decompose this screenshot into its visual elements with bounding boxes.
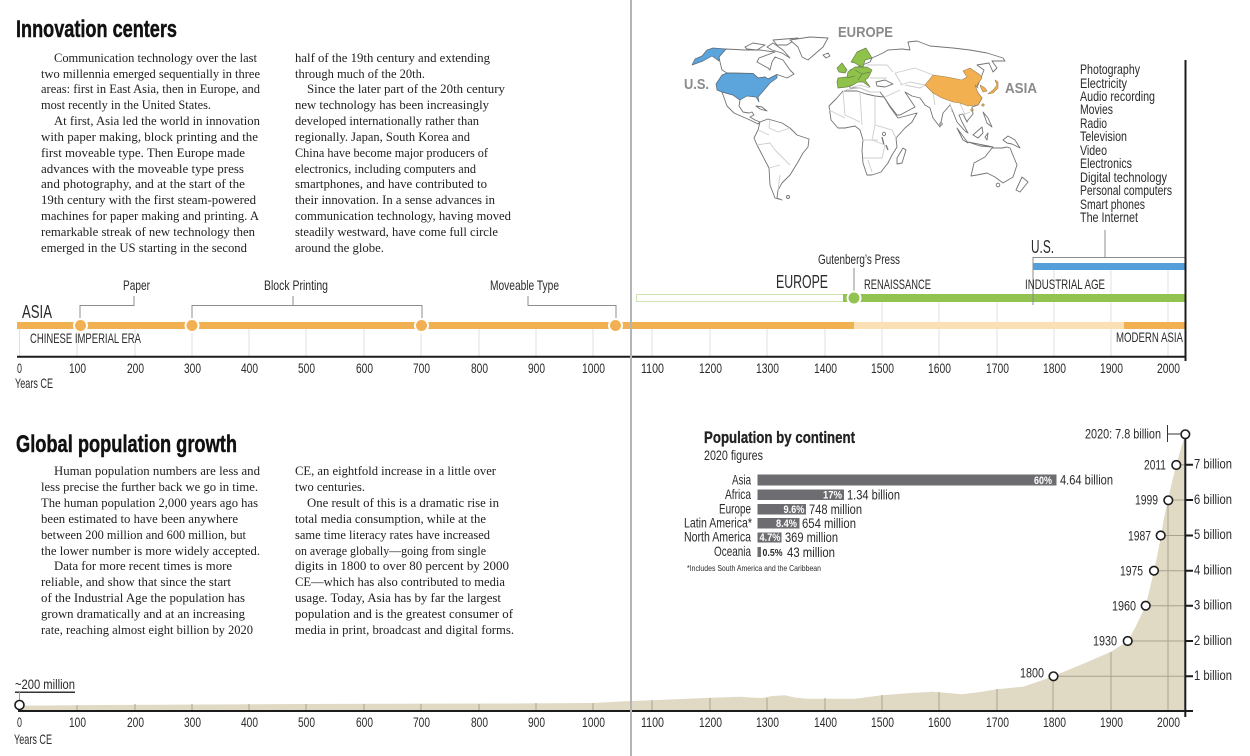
map: Europe xyxy=(837,48,872,88)
bar percentages: 9.6% xyxy=(784,504,805,516)
footnote: *Includes South America and the Caribbean xyxy=(687,564,821,573)
data point labels: 1975 xyxy=(1120,562,1143,578)
axis labels: population years: 100 xyxy=(69,714,86,730)
axis labels: timeline years: 1300 xyxy=(756,360,779,376)
area chart: world population xyxy=(14,425,1232,747)
data point labels: 2011 xyxy=(1144,456,1166,472)
text block: innovation centers column two: half of the 19th century and extending xyxy=(295,51,491,65)
text block: innovation centers column one: most recently in the United States. xyxy=(41,98,211,112)
text block: population column one: rate, reaching almost eight billion by 2020 xyxy=(41,623,253,637)
text block: population column one xyxy=(41,464,261,637)
timeline labels: Gutenberg’s Press xyxy=(818,251,900,267)
text block: population column one: of the Industrial Age the population has xyxy=(41,591,245,605)
~200 million callout: ~200 million xyxy=(15,676,75,692)
bar percentages: 4.7% xyxy=(760,532,781,544)
value labels: 369 million xyxy=(785,529,838,545)
data point markers xyxy=(15,430,1190,710)
data point labels: 1930 xyxy=(1093,632,1117,648)
text block: population column one: the lower number is more widely accepted. xyxy=(41,544,260,558)
text block: innovation centers column two: China have become major producers of xyxy=(295,146,489,160)
axis labels: population years: 2000 xyxy=(1157,714,1180,730)
text block: innovation centers column one: emerged in the US starting in the second xyxy=(41,241,248,255)
axis labels: timeline years: 1100 xyxy=(641,360,664,376)
bar percentages: 60% xyxy=(1034,475,1052,487)
text block: population column one: less precise the further back we go in time. xyxy=(41,480,258,494)
list: US technologies: Radio xyxy=(1080,115,1107,131)
axis labels: timeline years: 0 xyxy=(17,360,22,376)
axis labels: timeline years: 300 xyxy=(184,360,201,376)
axis labels: population years: 1100 xyxy=(641,714,664,730)
map: East Asia xyxy=(925,68,998,111)
continent labels: Europe xyxy=(719,500,751,516)
text block: population column one: Data for more recent times is more xyxy=(54,559,232,573)
axis labels: population years: 600 xyxy=(356,714,373,730)
billion axis labels xyxy=(1194,456,1232,683)
billion axis labels: 5 billion xyxy=(1194,526,1232,542)
axis labels: timeline years: 1800 xyxy=(1043,360,1066,376)
text block: innovation centers column one: machines for paper making and printing. A xyxy=(41,209,259,223)
list: US technologies: Digital technology xyxy=(1080,169,1167,185)
bar: Europe eras xyxy=(636,294,1185,302)
billion axis labels: 1 billion xyxy=(1194,667,1232,683)
continent labels: Asia xyxy=(732,472,751,488)
list: US technologies: Personal computers xyxy=(1080,182,1172,198)
timeline labels: RENAISSANCE xyxy=(864,276,931,292)
callouts: Asia inventions xyxy=(80,230,1185,318)
axis labels: timeline years: 500 xyxy=(298,360,315,376)
axis labels: timeline years: Years CE xyxy=(15,375,53,391)
text block: population column two: population and is the greatest consumer of xyxy=(295,607,514,621)
continent labels: Latin America* xyxy=(684,514,752,530)
timeline labels: EUROPE xyxy=(776,272,828,292)
axis labels: timeline years: 1200 xyxy=(699,360,722,376)
text block: innovation centers column two: developed internationally rather than xyxy=(295,114,480,128)
bar percentages: 17% xyxy=(823,490,842,502)
chart subtitle: 2020 figures xyxy=(704,447,763,463)
billion axis labels: 4 billion xyxy=(1194,562,1232,578)
data point labels xyxy=(1020,426,1166,680)
timeline labels: INDUSTRIAL AGE xyxy=(1025,276,1105,292)
continent labels: North America xyxy=(684,528,751,544)
list: US technologies: Smart phones xyxy=(1080,196,1145,212)
text block: population column one: grown dramatically and at an increasing xyxy=(41,607,246,621)
timeline labels: Block Printing xyxy=(264,277,328,293)
chart title: Population by continent xyxy=(704,428,855,447)
value labels xyxy=(785,472,1113,560)
text block: innovation centers column one: areas: first in East Asia, then in Europe, and xyxy=(41,82,261,96)
axis labels: population years: 1700 xyxy=(986,714,1009,730)
axis labels: population years: 700 xyxy=(413,714,430,730)
axis labels: population years: 800 xyxy=(471,714,488,730)
list: US technologies: Television xyxy=(1080,128,1127,144)
text block: innovation centers column two xyxy=(295,51,512,255)
map labels: EUROPE xyxy=(838,24,893,41)
value labels: 1.34 billion xyxy=(847,486,900,502)
text block: innovation centers column one: first moveable type. Then Europe made xyxy=(41,146,245,160)
timeline labels xyxy=(22,237,1183,346)
axis labels: timeline years: 1500 xyxy=(871,360,894,376)
data point labels: 1960 xyxy=(1112,598,1136,614)
bar percentages xyxy=(760,475,1052,544)
value labels: 748 million xyxy=(809,501,862,517)
axis labels: timeline years: 600 xyxy=(356,360,373,376)
axis labels: timeline years: 700 xyxy=(413,360,430,376)
text block: innovation centers column one: At first, Asia led the world in innovation xyxy=(54,114,261,128)
2020 marker line xyxy=(1167,425,1180,442)
axis labels: population years: 1000 xyxy=(582,714,605,730)
bar chart: population by continent: 0.5% xyxy=(762,548,783,559)
continent labels: Africa xyxy=(725,486,751,502)
data point labels: 2020: 7.8 billion xyxy=(1085,426,1161,442)
axis labels: population years: 1500 xyxy=(871,714,894,730)
text block: innovation centers column two: their innovation. In a sense advances in xyxy=(295,193,496,207)
bars xyxy=(758,474,1056,557)
axis labels: population years: Years CE xyxy=(14,731,52,747)
text block: innovation centers column one: and photography, and at the start of the xyxy=(41,177,245,191)
list: US technologies: The Internet xyxy=(1080,209,1138,225)
axis labels: timeline years: 2000 xyxy=(1157,360,1180,376)
text block: innovation centers column two: smartphones, and have contributed to xyxy=(295,177,487,191)
list: US technologies: Electronics xyxy=(1080,155,1132,171)
map labels xyxy=(684,24,1037,97)
text block: population column two: digits in 1800 to over 80 percent by 2000 xyxy=(295,559,509,573)
axis labels: timeline years: 1900 xyxy=(1100,360,1123,376)
text block: population column two: media in print, broadcast and digital forms. xyxy=(295,623,514,637)
billion axis labels: 7 billion xyxy=(1194,456,1232,472)
axis labels: population years: 1600 xyxy=(928,714,951,730)
text block: innovation centers column two: Since the later part of the 20th century xyxy=(307,82,506,96)
text block: population column two: total media consumption, while at the xyxy=(295,512,486,526)
text block: population column two: on average globally—going from single xyxy=(295,544,486,558)
timeline labels: MODERN ASIA xyxy=(1116,329,1183,345)
axis labels: population years: 300 xyxy=(184,714,201,730)
text block: innovation centers column one: Communication technology over the last xyxy=(54,51,257,65)
text block: innovation centers column one: two millennia emerged sequentially in three xyxy=(41,67,260,81)
axis labels: timeline years: 400 xyxy=(241,360,258,376)
text block: population column one: between 200 million and 600 million, but xyxy=(41,528,246,542)
axis labels: population years: 1900 xyxy=(1100,714,1123,730)
map: United States xyxy=(692,48,777,102)
axis labels: population years: 1300 xyxy=(756,714,779,730)
map: interior borders xyxy=(757,65,970,190)
list: US technologies: Electricity xyxy=(1080,75,1127,91)
timeline labels: CHINESE IMPERIAL ERA xyxy=(30,330,141,346)
text block: population column two xyxy=(295,464,514,637)
text block: innovation centers column two: steadily westward, have come full circle xyxy=(295,225,498,239)
data point labels: 1999 xyxy=(1135,492,1158,508)
~200 million callout xyxy=(15,676,75,700)
axis labels: population years: 200 xyxy=(127,714,144,730)
bar: US era xyxy=(1033,263,1185,270)
axis labels: population years: 900 xyxy=(528,714,545,730)
map: land outlines xyxy=(719,37,1028,200)
heading: Innovation centers: Innovation centers xyxy=(16,16,177,43)
continent labels xyxy=(684,472,752,559)
text block: innovation centers column two: regionally. Japan, South Korea and xyxy=(295,130,471,144)
markers: Asia inventions and Gutenberg xyxy=(74,292,860,332)
value labels: 43 million xyxy=(787,544,835,560)
axis labels: timeline years xyxy=(15,360,1180,391)
text block: innovation centers column two: through much of the 20th. xyxy=(295,67,425,81)
billion axis labels: 6 billion xyxy=(1194,491,1232,507)
axis labels: population years xyxy=(14,714,1180,747)
axis labels: population years: 400 xyxy=(241,714,258,730)
timeline labels: Moveable Type xyxy=(490,277,559,293)
text block: population column one: been estimated to have been anywhere xyxy=(41,512,238,526)
map labels: ASIA xyxy=(1005,80,1037,97)
text block: population column one: The human population 2,000 years ago has xyxy=(41,496,258,510)
axis labels: population years: 500 xyxy=(298,714,315,730)
text block: population column two: two centuries. xyxy=(295,480,365,494)
fold line xyxy=(630,0,632,756)
timeline labels: Paper xyxy=(123,277,150,293)
text block: innovation centers column one: advances with the moveable type press xyxy=(41,162,244,176)
bar: Asia eras xyxy=(17,322,1185,329)
heading: Global population growth: Global population growth xyxy=(16,431,237,458)
axis labels: population years: 1400 xyxy=(814,714,837,730)
bar chart: population by continent xyxy=(684,428,1113,573)
text block: population column two: usage. Today, Asia has by far the largest xyxy=(295,591,502,605)
text block: population column two: same time literacy rates have increased xyxy=(295,528,491,542)
text block: population column two: CE—which has also contributed to media xyxy=(295,575,505,589)
text block: innovation centers column one: 19th century with the first steam-powered xyxy=(41,193,257,207)
list: US technologies: Movies xyxy=(1080,101,1113,117)
text block: innovation centers column two: around the globe. xyxy=(295,241,384,255)
continent labels: Oceania xyxy=(714,543,751,559)
axis labels: population years: 1200 xyxy=(699,714,722,730)
bar percentages: 8.4% xyxy=(776,518,797,530)
text block: population column one: reliable, and show that since the start xyxy=(41,575,232,589)
timeline: Innovation centers xyxy=(15,60,1186,391)
text block: innovation centers column two: communication technology, having moved xyxy=(295,209,512,223)
text block: population column two: One result of this is a dramatic rise in xyxy=(307,496,500,510)
axis labels: timeline years: 1000 xyxy=(582,360,605,376)
axis labels: timeline years: 1700 xyxy=(986,360,1009,376)
timeline labels: U.S. xyxy=(1031,237,1054,257)
value labels: 4.64 billion xyxy=(1060,472,1113,488)
text block: population column two: CE, an eightfold increase in a little over xyxy=(295,464,497,478)
axes xyxy=(17,60,1186,361)
data point labels: 1987 xyxy=(1128,528,1151,544)
list: US technologies: Video xyxy=(1080,142,1107,158)
timeline labels: ASIA xyxy=(22,302,52,322)
value labels: 654 million xyxy=(802,515,856,531)
axis labels: timeline years: 900 xyxy=(528,360,545,376)
text block: population column one: Human population numbers are less and xyxy=(54,464,261,478)
billion axis labels: 3 billion xyxy=(1194,596,1232,612)
billion axis labels: 2 billion xyxy=(1194,632,1232,648)
list: US technologies: Audio recording xyxy=(1080,88,1155,104)
axis labels: population years: 1800 xyxy=(1043,714,1066,730)
axis labels: timeline years: 1400 xyxy=(814,360,837,376)
axes xyxy=(18,434,1193,717)
axis labels: timeline years: 800 xyxy=(471,360,488,376)
axis labels: timeline years: 100 xyxy=(69,360,86,376)
list: US technologies xyxy=(1080,61,1172,225)
axis labels: timeline years: 200 xyxy=(127,360,144,376)
axis labels: population years: 0 xyxy=(17,714,22,730)
text block: innovation centers column two: new technology has been increasingly xyxy=(295,98,490,112)
world map xyxy=(692,37,1028,200)
text block: innovation centers column one xyxy=(41,51,261,255)
text block: innovation centers column one: remarkable streak of new technology then xyxy=(41,225,256,239)
axis labels: timeline years: 1600 xyxy=(928,360,951,376)
map labels: U.S. xyxy=(684,76,709,93)
list: US technologies: Photography xyxy=(1080,61,1140,77)
data point labels: 1800 xyxy=(1020,664,1044,680)
text block: innovation centers column two: electronics, including computers and xyxy=(295,162,477,176)
text block: innovation centers column one: with paper making, block printing and the xyxy=(41,130,258,144)
